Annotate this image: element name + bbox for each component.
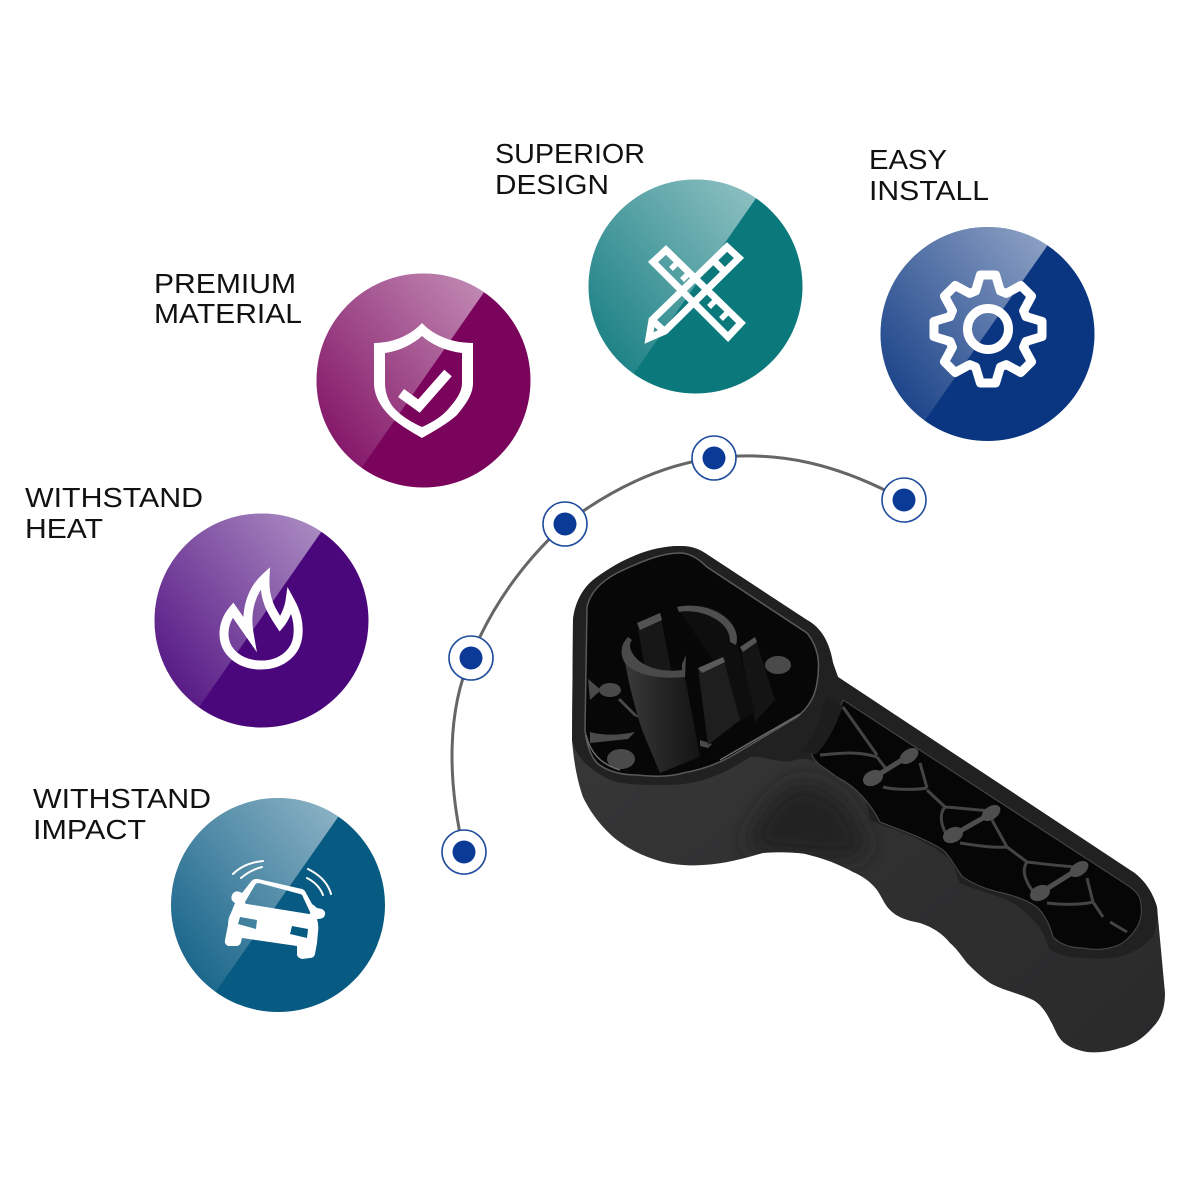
timeline node 2 — [449, 636, 493, 680]
small recess details — [588, 656, 791, 769]
badge: withstand impact — [171, 798, 385, 1012]
icon: shield check — [374, 323, 473, 438]
head central post — [622, 605, 775, 773]
timeline node 1 — [442, 830, 486, 874]
connector arc — [452, 456, 904, 852]
heading: premium material: PREMIUM — [154, 268, 296, 299]
timeline node 5 — [882, 478, 926, 522]
heading: easy install — [869, 144, 989, 206]
dark shading on grip — [745, 783, 868, 859]
arm ribs — [820, 707, 1127, 932]
heading: withstand heat: WITHSTAND — [25, 482, 203, 513]
heading: premium material — [154, 268, 302, 329]
arm rib pins — [861, 745, 1091, 904]
icon: flame — [224, 578, 298, 665]
heading: withstand heat — [25, 482, 203, 544]
rim highlight on lower edge — [586, 714, 800, 770]
icon: car with signals — [225, 861, 331, 959]
heading: withstand impact: WITHSTAND — [33, 783, 211, 814]
handle outer body — [572, 546, 1165, 1052]
icon: gear — [934, 275, 1042, 383]
handle top face rim — [572, 546, 1157, 959]
heading: premium material: MATERIAL — [154, 298, 302, 329]
heading: easy install: INSTALL — [869, 175, 989, 206]
heading: withstand impact — [33, 783, 211, 845]
heading: superior design: DESIGN — [495, 169, 609, 200]
product photo: black handle — [572, 546, 1165, 1052]
junction fill — [800, 695, 843, 754]
heading: withstand heat: HEAT — [25, 513, 103, 544]
arm recess — [812, 700, 1141, 949]
head recess — [585, 553, 818, 776]
timeline node 3 — [543, 502, 587, 546]
icon: pencil and ruler — [649, 247, 741, 338]
badge: withstand heat — [154, 514, 368, 728]
badge: easy install — [880, 227, 1094, 441]
timeline node 4 — [692, 436, 736, 480]
heading: superior design — [495, 138, 645, 200]
heading: easy install: EASY — [869, 144, 947, 175]
heading: superior design: SUPERIOR — [495, 138, 645, 169]
badge: superior design — [588, 180, 802, 394]
badge: premium material — [316, 274, 530, 488]
heading: withstand impact: IMPACT — [33, 814, 146, 845]
